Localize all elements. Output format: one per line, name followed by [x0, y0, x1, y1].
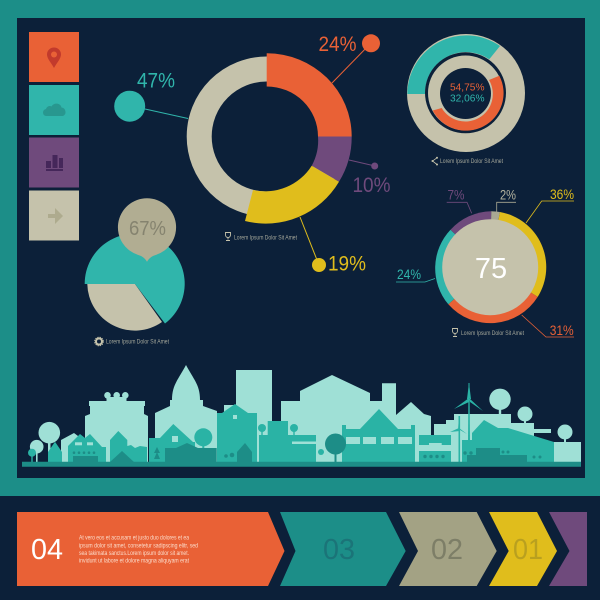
paragraph: sea takimata sanctus.Lorem ipsum dolor sit amet. — [79, 550, 189, 557]
panel: icon tiles — [29, 32, 79, 240]
values: 54,75% — [450, 82, 484, 94]
callout: 24%: 24% — [318, 33, 356, 56]
chart: 67% pie — [85, 198, 185, 331]
callout: 47%: 47% — [137, 70, 175, 92]
label: 2% — [497, 186, 516, 212]
step 04: orange arrow — [17, 512, 284, 586]
label: 2%: 2% — [500, 186, 516, 202]
chart: double ring donut — [407, 34, 525, 152]
callout: 19%: 19% — [328, 252, 366, 276]
chart: 75 score ring: 75 — [475, 253, 507, 285]
bubble: 67%: 67% — [129, 218, 166, 240]
paragraph: invidunt ut labore et dolore magna aliquyam erat — [79, 558, 189, 565]
label: 7%: 7% — [448, 186, 464, 202]
caption: ring donut — [432, 157, 503, 166]
step 02: beige arrow: 02 — [431, 534, 463, 566]
callout: 47% — [114, 70, 188, 122]
caption: main donut — [226, 232, 297, 241]
step 01: yellow arrow: 01 — [513, 534, 543, 566]
label: 24%: 24% — [397, 266, 421, 282]
chart: 75 score ring — [435, 211, 546, 323]
label: 31% — [522, 315, 574, 338]
middle layer: teal buildings — [28, 383, 554, 462]
paragraph: At vero eos et accusam et justo duo dolores et ea — [79, 535, 189, 542]
step 03: teal arrow — [280, 512, 406, 586]
caption: pie: Lorem Ipsum Dolor Sit Amet — [106, 339, 169, 346]
caption: main donut: Lorem Ipsum Dolor Sit Amet — [234, 234, 297, 241]
callout: 24% — [318, 33, 380, 83]
caption: score ring — [452, 328, 524, 337]
tile: cloud — [29, 85, 79, 135]
front layer: dark details — [22, 434, 581, 467]
step: purple arrow tail — [549, 512, 587, 586]
values — [450, 82, 484, 105]
label: 36%: 36% — [550, 186, 574, 202]
caption: score ring: Lorem Ipsum Dolor Sit Amet — [461, 330, 524, 337]
tile: arrow — [29, 190, 79, 240]
label: 7% — [447, 186, 472, 213]
step 01: yellow arrow — [489, 512, 557, 586]
illustration: city skyline — [22, 365, 581, 467]
callout: 19% — [300, 217, 366, 276]
values: 32,06% — [450, 93, 484, 105]
callout: 10% — [349, 160, 390, 197]
back layer: light buildings — [30, 365, 581, 464]
step 04: orange arrow: 04 — [31, 534, 63, 566]
paragraph: ipsum dolor sit amet, consetetur sadipscing elitr, sed — [79, 542, 198, 549]
label: 31%: 31% — [550, 322, 574, 338]
tile: location pin — [29, 32, 79, 82]
chart: main donut — [199, 53, 352, 224]
caption: pie — [95, 337, 169, 346]
windows — [75, 415, 551, 451]
step 02: beige arrow — [399, 512, 497, 586]
callout: 10%: 10% — [352, 174, 390, 197]
tile: bar chart — [29, 138, 79, 188]
step 03: teal arrow: 03 — [323, 534, 355, 566]
caption: ring donut: Lorem Ipsum Dolor Sit Amet — [440, 158, 503, 165]
label: 36% — [526, 186, 574, 223]
